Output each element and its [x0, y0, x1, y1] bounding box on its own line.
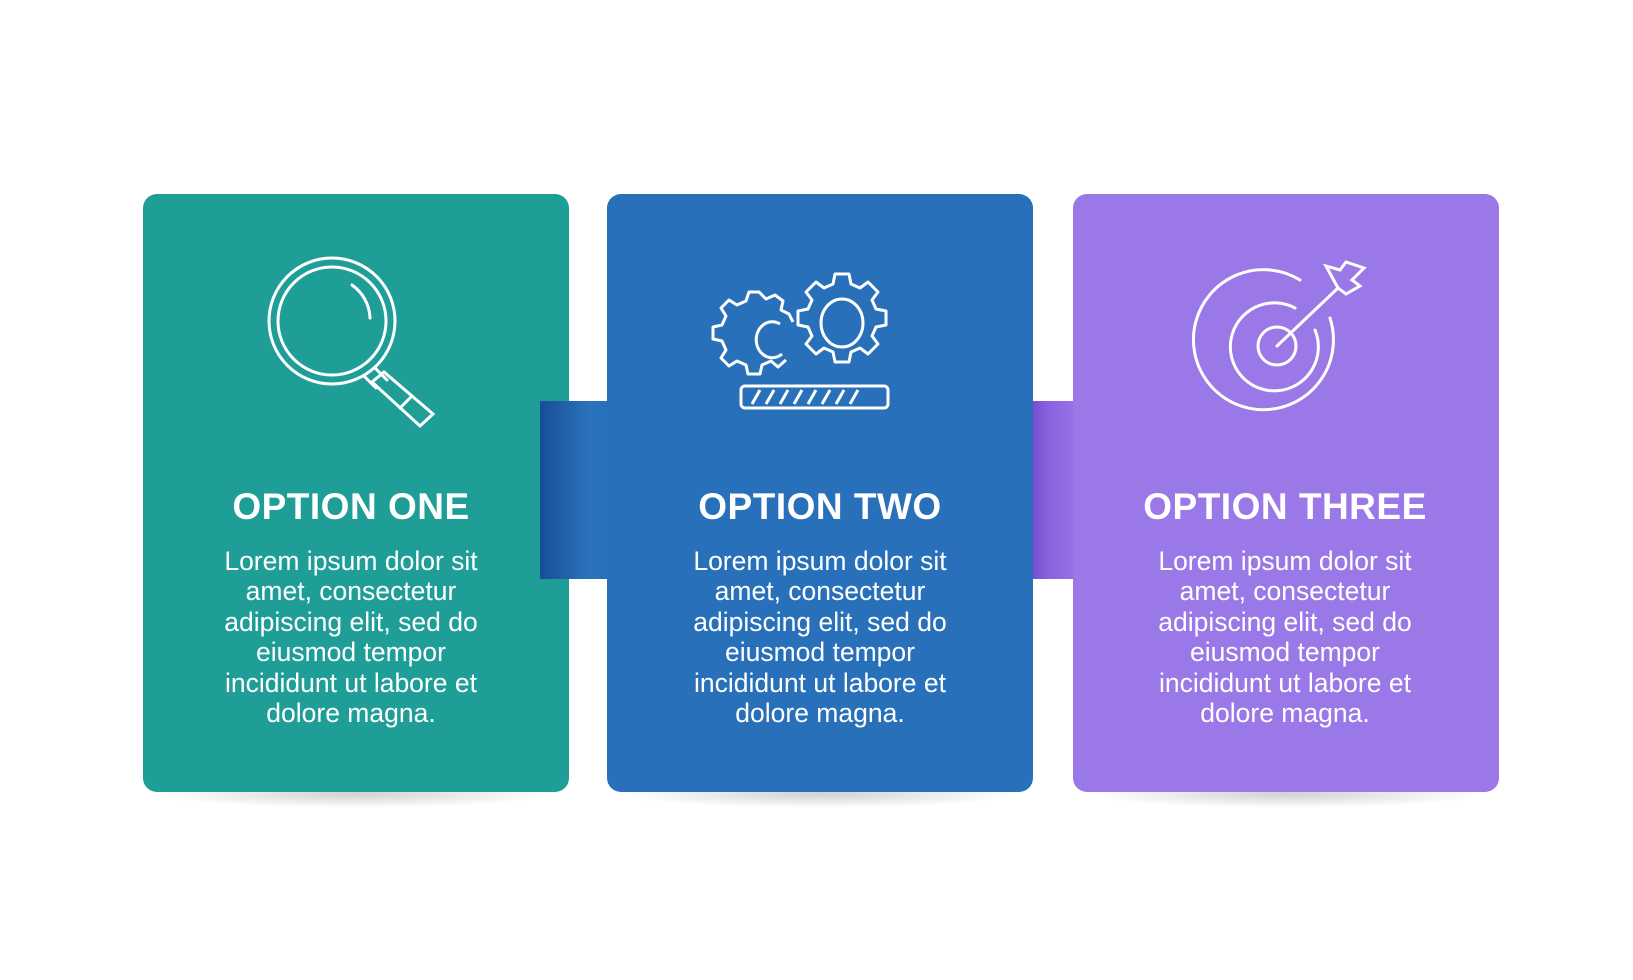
text: option two [693, 546, 947, 728]
panel: option three [1073, 194, 1499, 792]
icon: target [1192, 260, 1367, 412]
shadow: card three [1086, 780, 1486, 808]
text: option three: adipiscing elit, sed do [1158, 607, 1412, 637]
text: option one: eiusmod tempor [256, 637, 446, 667]
heading: option one: OPTION ONE [232, 486, 470, 527]
text: option two: Lorem ipsum dolor sit [693, 546, 947, 576]
text: option three: amet, consectetur [1180, 576, 1390, 606]
text: option one: incididunt ut labore et [225, 668, 477, 698]
panel: option two [607, 194, 1033, 792]
text: option three: eiusmod tempor [1190, 637, 1380, 667]
text: option one: dolore magna. [266, 698, 436, 728]
text: option two: eiusmod tempor [725, 637, 915, 667]
text: option two: amet, consectetur [715, 576, 925, 606]
heading: option three: OPTION THREE [1143, 486, 1427, 527]
text: option one: amet, consectetur [246, 576, 456, 606]
connector: two to three [1006, 401, 1086, 579]
text: option three [1158, 546, 1412, 728]
shadow: card two [620, 780, 1020, 808]
text: option one: Lorem ipsum dolor sit [224, 546, 478, 576]
connector: one to two [540, 401, 620, 579]
text: option three: dolore magna. [1200, 698, 1370, 728]
text: option two: dolore magna. [735, 698, 905, 728]
shadow: card one [155, 780, 555, 808]
icon: gears [712, 272, 890, 410]
text: option three: incididunt ut labore et [1159, 668, 1411, 698]
text: option three: Lorem ipsum dolor sit [1158, 546, 1412, 576]
heading: option two: OPTION TWO [698, 486, 942, 527]
text: option two: incididunt ut labore et [694, 668, 946, 698]
text: option one: adipiscing elit, sed do [224, 607, 478, 637]
panel: option one [143, 194, 569, 792]
text: option one [224, 546, 478, 728]
text: option two: adipiscing elit, sed do [693, 607, 947, 637]
icon: magnifier [268, 256, 436, 428]
